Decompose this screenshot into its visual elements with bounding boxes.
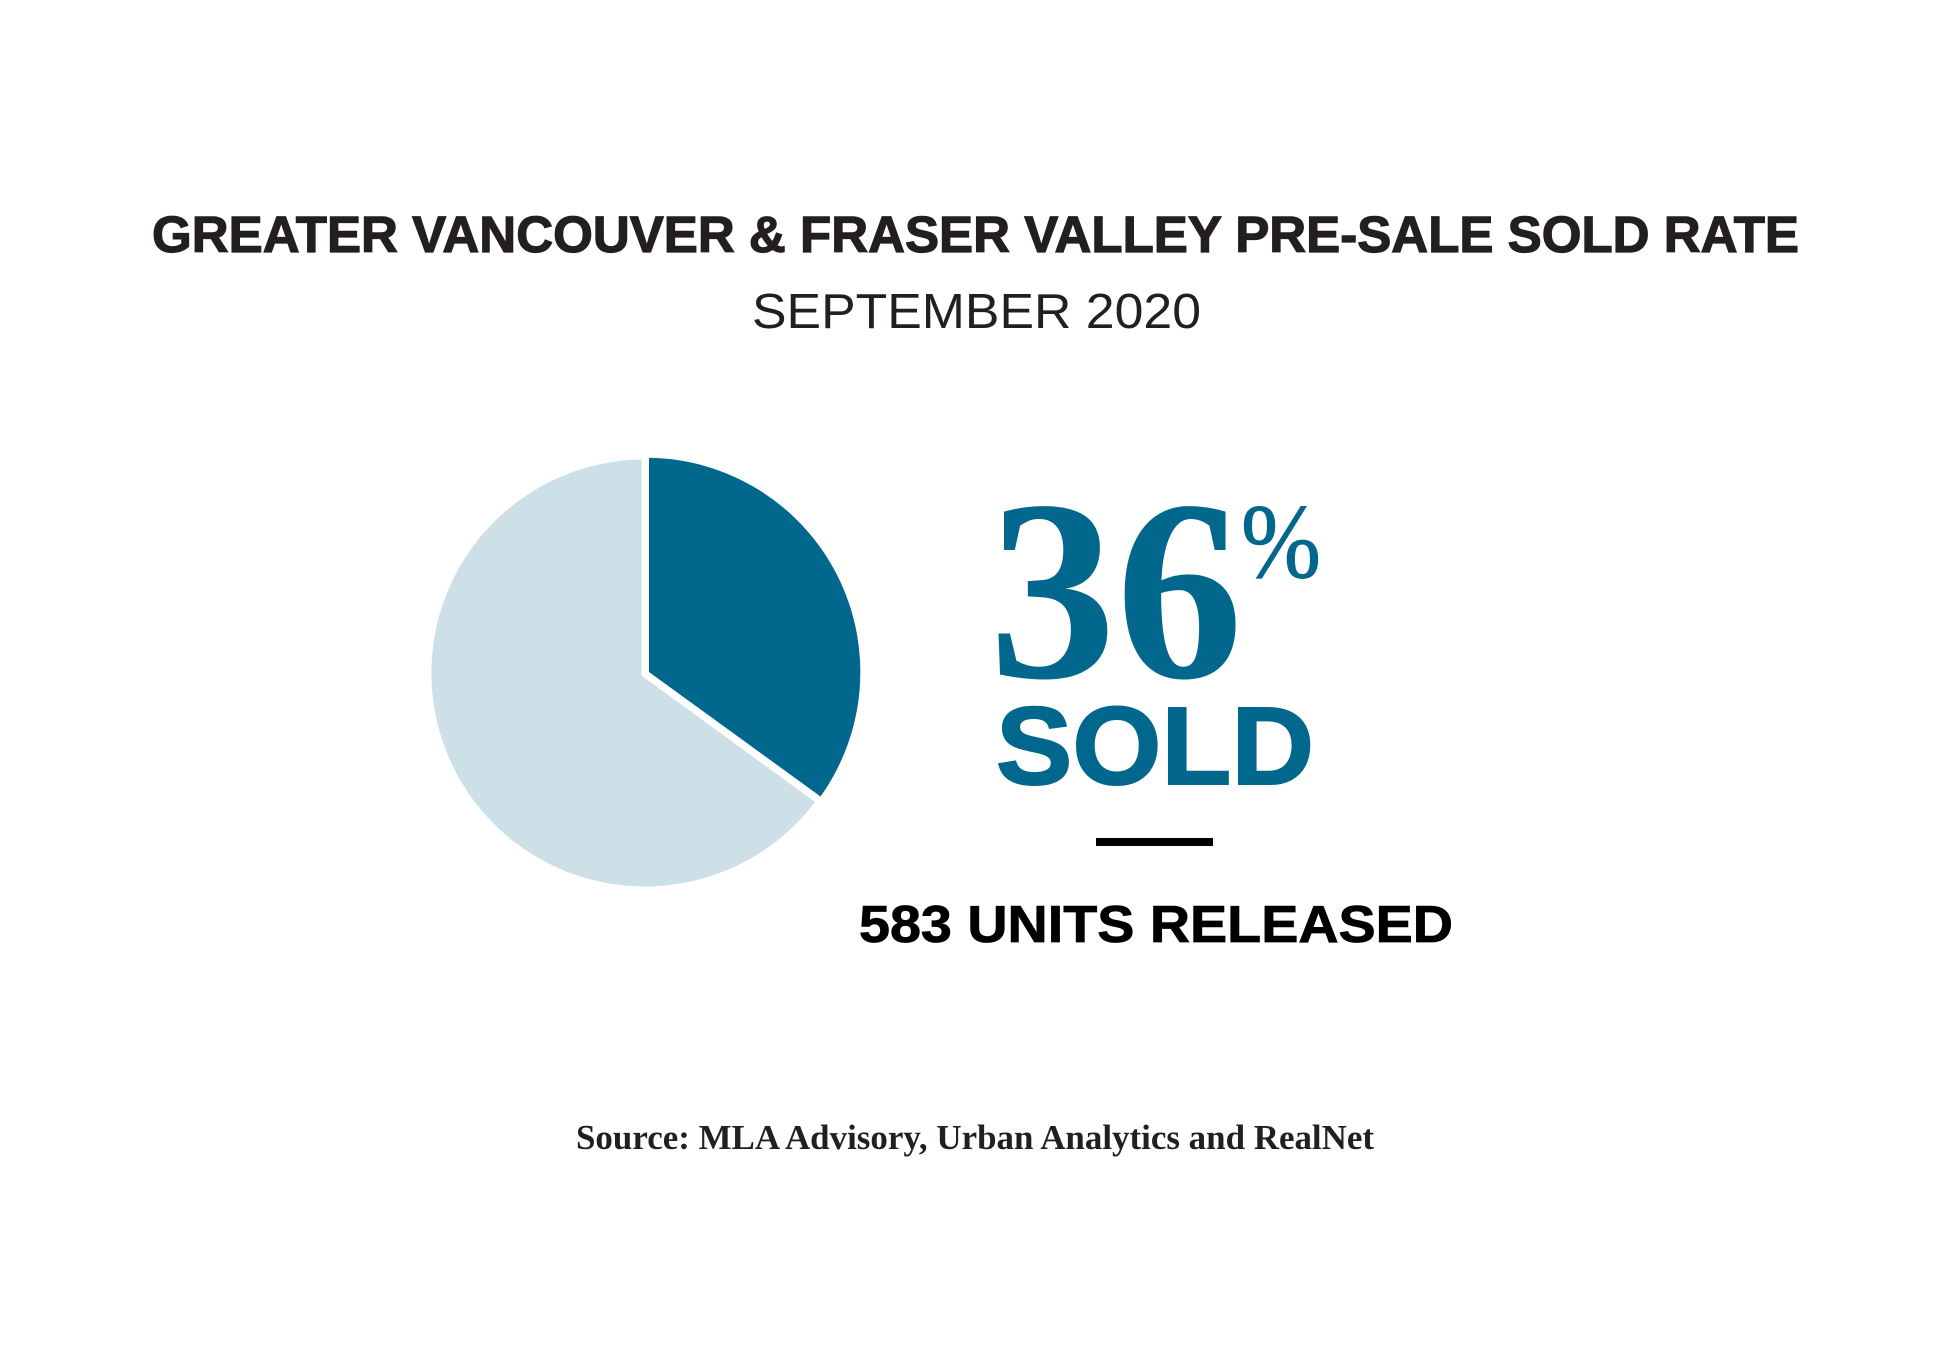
pie slice: 36% sold (649, 458, 860, 796)
subtitle: date: SEPTEMBER 2020 (752, 285, 1201, 339)
label: sold: SOLD (996, 685, 1314, 808)
divider bar (1096, 838, 1213, 846)
big number: 36%: 36 (989, 447, 1243, 733)
percent sign: % (1241, 483, 1321, 600)
pie chart (431, 458, 860, 886)
pie slice: unsold share (431, 460, 815, 886)
title: GREATER VANCOUVER & FRASER VALLEY PRE-SALE SOLD RATE (152, 206, 1799, 263)
units released: 583 UNITS RELEASED (859, 896, 1453, 954)
source note: Source: MLA Advisory, Urban Analytics and RealNet (576, 1118, 1374, 1157)
